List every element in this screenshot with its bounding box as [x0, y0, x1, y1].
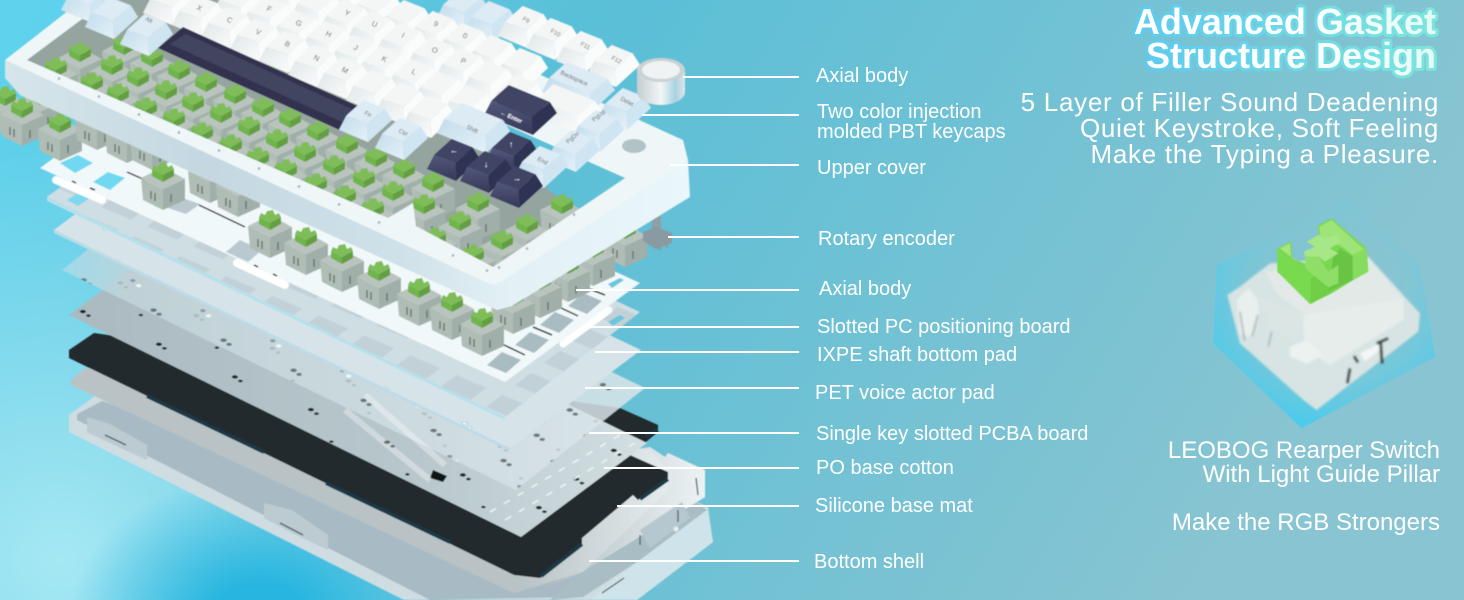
layer: slotted PC positioning board: [40, 69, 640, 382]
keycap legends: F12: [610, 55, 623, 66]
keycap legends: Ctrl: [397, 128, 408, 138]
keycap legends: Backspace: [559, 70, 589, 88]
switches below the frame: [0, 85, 647, 356]
keycap legends: End: [536, 156, 548, 167]
layer: IXPE shaft bottom pad: [47, 97, 640, 420]
switch housing: [1227, 257, 1420, 410]
layer: PET voice actor pad: [54, 132, 641, 451]
keycap legends: ← Enter: [499, 110, 523, 125]
icon: knob: [637, 58, 685, 105]
callout: Axial body (knob): Axial body: [816, 65, 908, 87]
keycap legends: N: [312, 53, 321, 63]
keycap legends: ↑: [509, 140, 513, 149]
callout: Slotted PC positioning board: Slotted PC positioning board: [817, 316, 1070, 338]
keycaps: [61, 0, 651, 208]
callout: Silicone base mat: Silicone base mat: [815, 495, 973, 517]
keycap legends: PgUp: [591, 109, 607, 124]
layer: bottom shell: [69, 393, 713, 600]
callout: Rotary encoder: Rotary encoder: [818, 228, 955, 250]
keycap legends: Y: [343, 8, 352, 18]
keycap legends: Shift: [465, 124, 479, 136]
keycap legends: [144, 3, 635, 183]
callout: Two color injection molded PBT keycaps: molded PBT keycaps: [817, 121, 1006, 143]
spacebar: [158, 27, 362, 132]
glow hexagon: [1213, 200, 1435, 428]
keycap legends: O: [430, 45, 440, 56]
keycap legends: 0: [461, 31, 469, 41]
switch caption: Make the RGB Strongers: [1172, 509, 1440, 536]
keycap legends: H: [324, 29, 333, 39]
keycap legends: F: [265, 4, 274, 14]
keycap legends: V: [254, 27, 263, 37]
switches inside the frame: [34, 35, 584, 292]
keycap legends: L: [410, 67, 418, 77]
keycap legends: C: [225, 15, 235, 26]
callout: PET voice actor pad: PET voice actor pad: [815, 382, 995, 404]
green stem: [1277, 218, 1368, 304]
keycap legends: M: [340, 65, 350, 76]
keycap legends: F10: [549, 28, 562, 39]
callout: PO base cotton: PO base cotton: [816, 457, 954, 479]
callout: Upper cover: Upper cover: [817, 157, 926, 179]
keycap legends: ↓: [484, 160, 488, 169]
title: [1134, 1, 1436, 76]
switch caption: [1168, 437, 1440, 536]
title: Advanced Gasket: [1134, 1, 1436, 42]
layer: silicone base mat: [69, 333, 668, 578]
subtitle text: [1021, 87, 1439, 169]
keycap legends: ←: [450, 146, 458, 155]
callout: Bottom shell: Bottom shell: [814, 551, 924, 573]
layer: PO base cotton: [71, 368, 668, 593]
keycap legends: B: [283, 39, 292, 49]
icon: rotary encoder: [643, 216, 672, 250]
keycap legends: K: [380, 54, 389, 64]
upper cover: [5, 0, 690, 310]
keycap legends: 9: [432, 19, 440, 29]
switch caption: With Light Guide Pillar: [1203, 461, 1440, 488]
keycap legends: G: [294, 18, 304, 29]
keycap legends: F9: [521, 16, 531, 25]
exploded keyboard: [0, 0, 713, 600]
keycap legends: PgDn: [565, 131, 581, 146]
keycap legends: I: [400, 31, 406, 40]
keycap legends: Alt: [144, 16, 153, 25]
subtitle text: Make the Typing a Pleasure.: [1090, 139, 1439, 169]
keycap legends: U: [370, 19, 379, 29]
callout: Single key slotted PCBA board: Single key slotted PCBA board: [816, 423, 1088, 445]
switch caption: LEOBOG Rearper Switch: [1168, 437, 1440, 464]
callout: Two color injection molded PBT keycaps: [642, 101, 1006, 143]
callout: Two color injection molded PBT keycaps: Two color injection: [817, 101, 982, 123]
subtitle text: 5 Layer of Filler Sound Deadening: [1021, 87, 1439, 117]
keycap legends: Fn: [363, 110, 372, 119]
title: Structure Design: [1146, 35, 1436, 76]
subtitle text: Quiet Keystroke, Soft Feeling: [1080, 113, 1439, 143]
frame well: [27, 0, 585, 267]
icon: LEOBOG switch: [1213, 200, 1435, 428]
keycap legends: Delet: [619, 96, 635, 108]
callout: IXPE shaft bottom pad: IXPE shaft bottom pad: [817, 344, 1017, 366]
keycap legends: →: [513, 174, 521, 183]
layer: single key slotted PCBA board: [69, 221, 647, 537]
layer: translucent PET plate: [62, 168, 645, 490]
keycap legends: J: [352, 43, 360, 53]
keycap legends: P: [459, 56, 468, 66]
keycap legends: X: [195, 3, 204, 13]
keycap legends: F11: [579, 41, 591, 52]
callout: Axial body (switches): Axial body: [819, 278, 911, 300]
